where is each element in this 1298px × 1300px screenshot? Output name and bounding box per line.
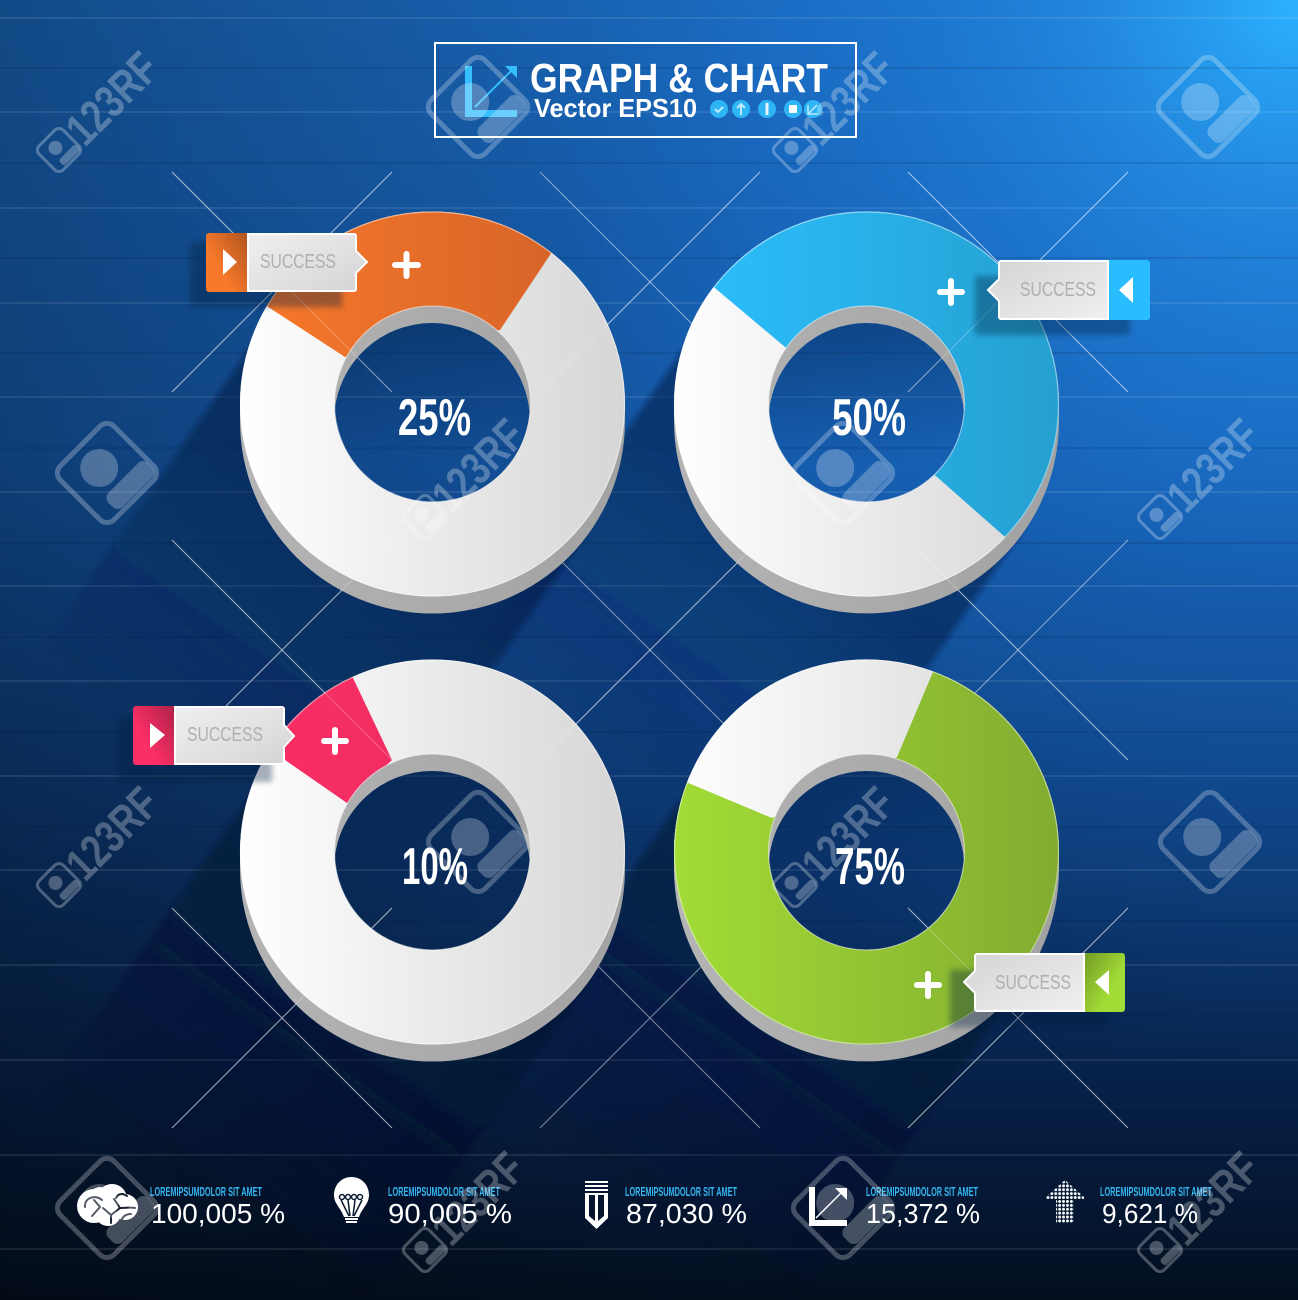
panel: 50% donut chart — [674, 211, 1059, 613]
watermark: 123RF logos: 123RF — [1156, 1142, 1270, 1255]
watermark: 123RF logos: 123RF — [55, 42, 169, 155]
value 10%: 10% — [402, 838, 468, 896]
donut side wall 25% — [240, 211, 625, 613]
watermark: 123RF logos: 123RF — [421, 409, 535, 522]
watermark: 123RF logos: 123RF — [1156, 409, 1270, 522]
stat label: LOREMIPSUMDOLOR SIT AMET — [625, 1185, 737, 1199]
tab arrow — [1095, 970, 1109, 995]
stat value: 100,005 % — [151, 1198, 285, 1229]
hole shading 25% — [334, 323, 530, 502]
orange slice 25% — [266, 212, 552, 357]
hole shading 10% — [334, 771, 530, 950]
stat: 90,005 % — [334, 1177, 512, 1229]
watermark: 123RF logos: 123RF — [791, 42, 905, 155]
icon: brain — [77, 1184, 138, 1226]
icon: chart arrow — [809, 1187, 847, 1226]
title block — [435, 43, 856, 137]
tag body — [988, 261, 1108, 319]
stat value: 15,372 % — [866, 1198, 980, 1229]
donut side wall 75% — [674, 660, 1059, 1061]
stat label: LOREMIPSUMDOLOR SIT AMET — [866, 1185, 978, 1199]
overlay diagonal lines on donuts — [172, 172, 1128, 1128]
stat: 87,030 % — [585, 1181, 747, 1229]
tag label: SUCCESS — [260, 251, 336, 273]
heading: GRAPH & CHART — [530, 55, 828, 101]
hole shading 50% — [769, 323, 964, 502]
icon: pencil — [585, 1181, 608, 1229]
long shadows behind donuts — [24, 312, 1023, 1300]
stat value: 9,621 % — [1102, 1198, 1198, 1229]
tag label: SUCCESS — [1020, 279, 1096, 301]
blue slice 50% — [714, 212, 1059, 538]
stat label: LOREMIPSUMDOLOR SIT AMET — [388, 1185, 500, 1199]
watermark: 123RF logos: 123RF — [791, 777, 905, 890]
panel: 75% donut chart — [674, 659, 1059, 1061]
tag body — [175, 707, 294, 764]
stat label: LOREMIPSUMDOLOR SIT AMET — [150, 1185, 262, 1199]
tab arrow — [1119, 277, 1133, 303]
green tab — [1082, 953, 1125, 1012]
stat: 9,621 % — [1046, 1180, 1212, 1229]
donut face 25% — [240, 211, 625, 596]
donut face 75% — [674, 659, 1059, 1045]
donut side wall 10% — [240, 660, 625, 1062]
tab arrow — [150, 723, 165, 748]
icon: light bulb — [334, 1177, 369, 1223]
plus icon — [917, 974, 939, 996]
blue tab — [1106, 260, 1150, 320]
tab arrow — [223, 249, 237, 275]
title frame — [435, 43, 856, 137]
panel: 25% donut chart — [240, 211, 625, 613]
stat value: 90,005 % — [388, 1198, 512, 1229]
stat label: LOREMIPSUMDOLOR SIT AMET — [1100, 1185, 1212, 1199]
plus icon — [324, 730, 346, 752]
donut side wall 50% — [674, 212, 1059, 613]
callout: green success tag — [917, 953, 1125, 1027]
orange tab — [206, 233, 250, 292]
callout: orange success tag — [190, 233, 418, 307]
value 50%: 50% — [832, 389, 906, 447]
icon: chart logo — [465, 66, 517, 117]
hole shading 75% — [769, 771, 964, 950]
tag label: SUCCESS — [187, 724, 263, 746]
stat: 100,005 % — [77, 1184, 285, 1229]
plus icon — [395, 254, 418, 276]
callout: blue success tag — [940, 260, 1150, 335]
donut face 10% — [240, 660, 625, 1044]
watermark: 123RF logos: 123RF — [421, 1142, 535, 1255]
pink slice 10% — [285, 677, 392, 803]
green slice 75% — [674, 659, 1059, 1045]
small round icons — [710, 100, 822, 118]
callout: pink success tag — [118, 706, 346, 782]
stat: 15,372 % — [809, 1185, 980, 1229]
value 25%: 25% — [398, 389, 471, 447]
icon: dotted arrow — [1046, 1180, 1084, 1223]
tag body — [964, 954, 1084, 1011]
tag body — [248, 234, 367, 291]
watermark: 123RF logos: 123RF — [55, 777, 169, 890]
value 75%: 75% — [835, 838, 905, 896]
stat value: 87,030 % — [626, 1198, 747, 1229]
plus icon — [940, 281, 962, 303]
donut face 50% — [674, 211, 1059, 597]
subheading: Vector EPS10 — [534, 93, 697, 123]
tag label: SUCCESS — [995, 972, 1071, 994]
pink tab — [133, 706, 177, 765]
panel: 10% donut chart — [240, 660, 625, 1062]
